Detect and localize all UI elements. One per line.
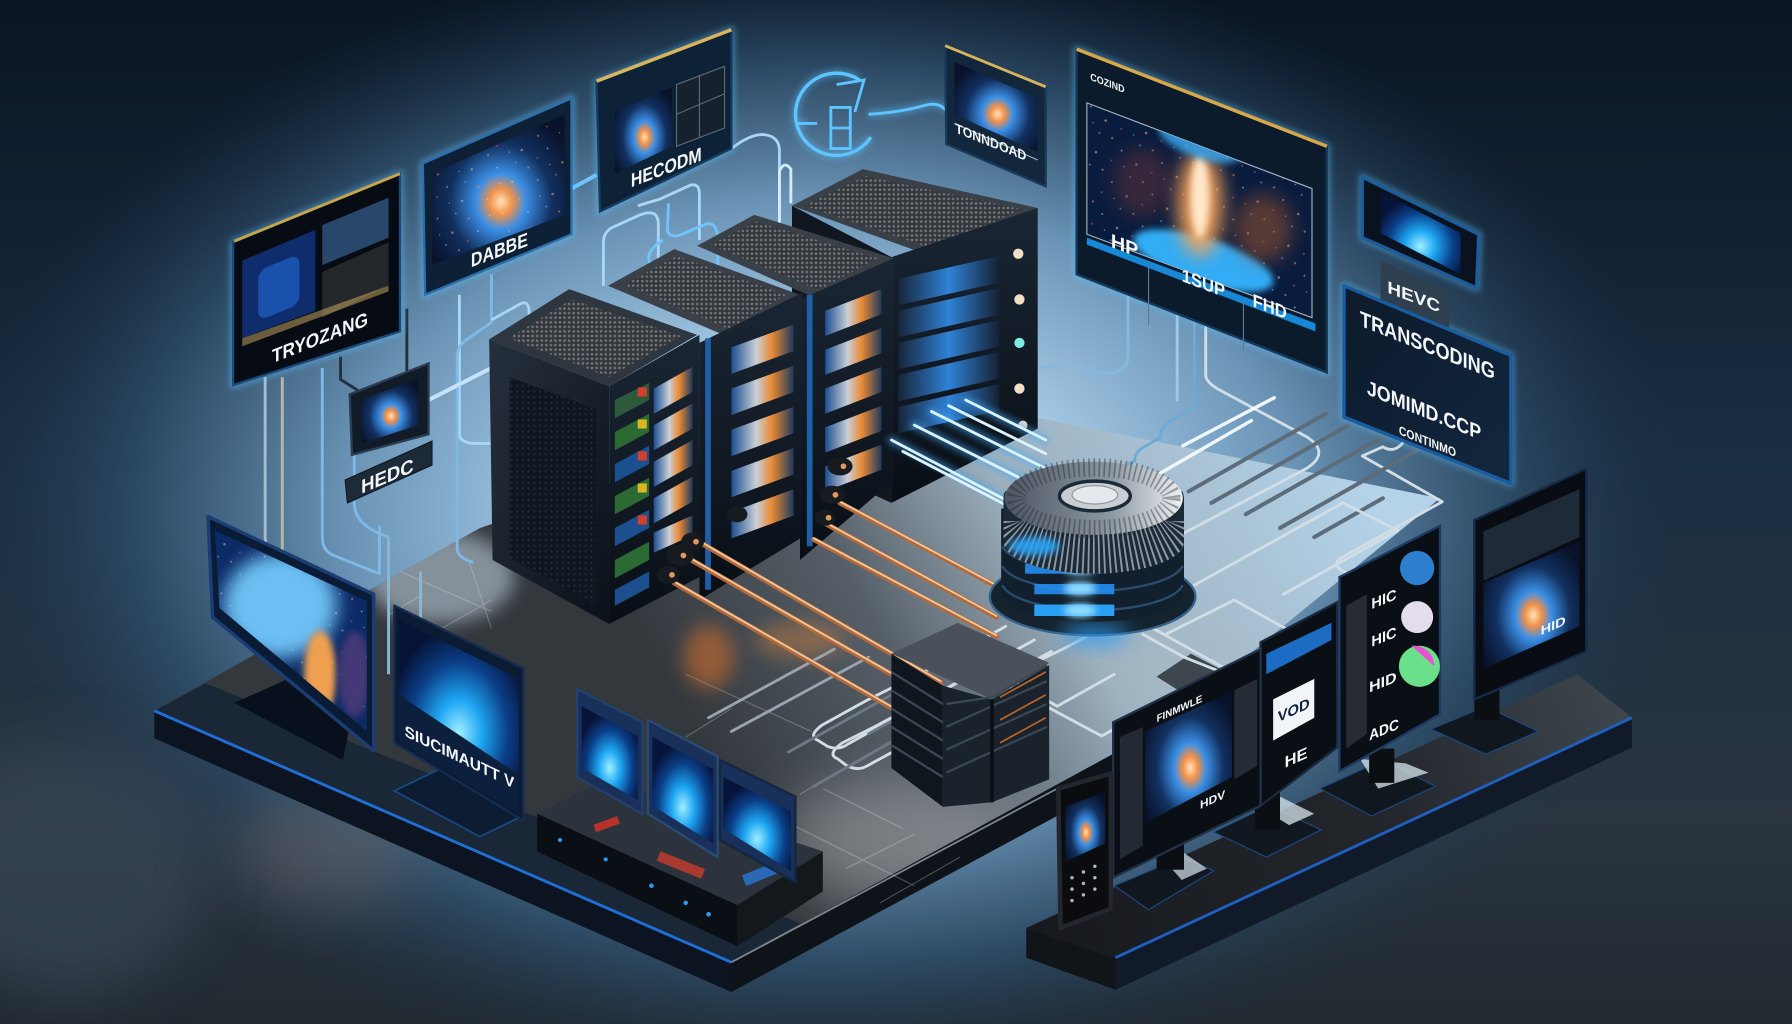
tag: HEVC: HEVC <box>1387 277 1440 316</box>
label: download: TONNDOAD <box>955 121 1026 165</box>
label: file name: FINMWLE <box>1157 693 1202 725</box>
icon: glowing transcode cycle <box>796 73 946 155</box>
panel: download screen <box>945 46 1046 186</box>
label: transcoding: TRYOZANG <box>272 309 368 368</box>
label: VOD: VOD <box>1278 695 1310 726</box>
monitor 3 <box>1320 526 1440 816</box>
connector cables: upper right and floor wiring <box>709 272 1442 786</box>
panel: dabbe screen <box>423 98 571 295</box>
label: VOD <box>1273 679 1314 741</box>
right device shelf <box>1026 674 1632 990</box>
mobile phone <box>1058 774 1111 928</box>
label: domain: JOMIMD.CCP <box>1367 376 1481 445</box>
monitor 4 <box>1431 469 1586 754</box>
monitor 2: VOD panel <box>1214 602 1337 857</box>
monitor 1 <box>1113 649 1261 910</box>
connector cables: upper left <box>265 135 791 674</box>
rack 3 <box>697 215 894 560</box>
label: HD: HDV <box>1200 787 1225 812</box>
label: ADC: ADC <box>1369 716 1399 744</box>
label: HD: HID <box>1541 613 1566 638</box>
panel glow halos <box>233 30 1511 483</box>
label: continuo: CONTINMO <box>1399 423 1456 460</box>
panel: main video player screen <box>1077 49 1327 373</box>
label: transcoding: TRANSCODING <box>1360 306 1495 384</box>
blue fibre cables <box>891 400 1046 511</box>
rack 2 <box>608 249 802 600</box>
middle rack unit <box>891 623 1049 807</box>
panel: hecodm screen <box>597 30 731 211</box>
label: hecodm: HECODM <box>631 144 702 192</box>
label: FHD: FHD <box>1253 291 1287 324</box>
label: HE: HE <box>1285 743 1307 772</box>
label: HID: HID <box>1369 669 1397 696</box>
copper cables <box>657 457 1011 714</box>
tag: HEVC <box>1381 261 1449 334</box>
panel: small HEDC monitor <box>345 363 432 503</box>
floor platform <box>154 389 1440 992</box>
panel: transcoding description <box>1344 286 1511 483</box>
label: HDC: HIC <box>1371 587 1397 613</box>
tag: HEDC: HEDC <box>361 455 414 499</box>
rack 4 <box>792 169 1038 503</box>
label: HDC second: HIC <box>1371 624 1397 651</box>
panel: transcoding screen <box>233 174 400 385</box>
label: HD: HP <box>1111 230 1138 262</box>
three preview screens <box>577 689 795 882</box>
label: dabbe: DABBE <box>471 229 528 272</box>
set-top encoder box <box>537 779 823 946</box>
label: simulcast TV: SIUCIMAUTT V <box>405 722 515 793</box>
label: 4K UHD: 1SUP <box>1182 266 1225 302</box>
central transcoding hub <box>990 462 1195 647</box>
rack 1 <box>489 289 699 624</box>
television 1 <box>208 517 374 760</box>
television 2 <box>394 606 523 837</box>
panel: phone screen <box>1362 177 1479 334</box>
label: top caption: COZIND <box>1090 71 1125 96</box>
